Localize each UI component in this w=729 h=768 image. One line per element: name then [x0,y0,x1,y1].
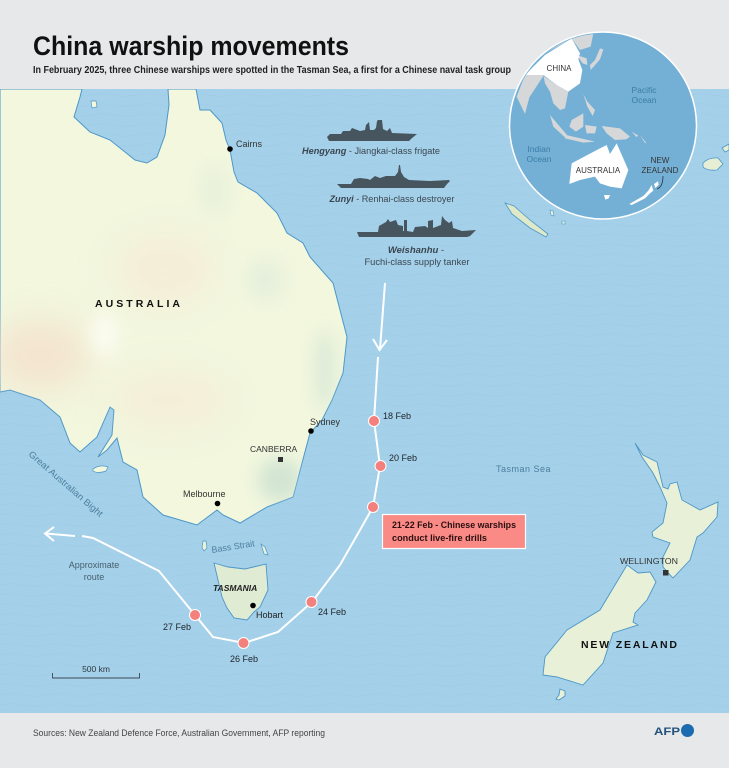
sources: Sources: New Zealand Defence Force, Australian Government, AFP reporting [33,728,325,738]
land: Fiji [703,144,729,170]
callout: conduct live-fire drills [392,533,487,544]
New Zealand [629,181,659,205]
inset label: Indian Ocean: Indian [527,144,551,154]
land: Tasmania [214,563,268,620]
city: Sydney: Sydney [310,417,341,427]
inset leader [657,176,663,189]
city: Wellington: WELLINGTON [620,556,678,566]
date labels: 27 Feb [163,622,191,632]
inset label: Australia: AUSTRALIA [576,166,621,175]
city: Melbourne [183,489,226,506]
inset label: New Zealand: NEW [651,156,669,165]
subtitle: In February 2025, three Chinese warships were spotted in the Tasman Sea, a first for a Chinese naval task group [33,64,511,76]
city: Canberra: CANBERRA [250,444,298,454]
sea label: Tasman Sea: Tasman Sea [496,464,551,474]
route markers [190,416,386,648]
ship: Weishanhu [357,216,476,268]
title: China warship movements [33,31,349,61]
city: Canberra [250,444,298,462]
Australia [569,143,628,188]
city: Sydney [308,417,341,434]
route line [82,357,380,643]
scale bar: 500 km [82,664,110,674]
header background [0,0,729,89]
date labels [163,411,417,664]
city: Melbourne: Melbourne [183,489,226,499]
label: Zunyi - Renhai-class destroyer [329,194,454,205]
land: Kangaroo Island [93,466,108,472]
land: New Caledonia [505,203,548,237]
date labels: 18 Feb [383,411,411,421]
land: New Zealand North Island [635,443,718,578]
label: Hengyang - Jiangkai-class frigate [302,146,440,157]
label: Weishanhu - [388,245,444,256]
label: Fuchi-class supply tanker [364,257,470,268]
route label: route [84,572,104,582]
land: New Zealand South Island [543,565,656,700]
ship: Zunyi [329,165,454,205]
ship: Hengyang [302,120,440,157]
AFP logo [654,724,694,738]
China [525,38,582,92]
callout [382,514,526,548]
arrow: route heading south [373,283,387,350]
callout: 21-22 Feb - Chinese warships [392,520,516,531]
city: Wellington [620,556,678,576]
inset label: Pacific Ocean: Pacific [631,85,657,95]
date labels: 24 Feb [318,607,346,617]
country label: Australia: AUSTRALIA [95,298,180,310]
land: small islands [550,210,565,224]
sea label: Great Australian Bight: Great Australian Bight [27,449,105,519]
land: Bass Strait islands [202,541,268,555]
inset label: Pacific Ocean: Ocean [631,95,657,105]
date labels: 26 Feb [230,654,258,664]
inset label: New Zealand: ZEALAND [642,166,679,175]
region label: Tasmania: TASMANIA [213,583,257,593]
sea label: Bass Strait: Bass Strait [211,538,256,555]
city: Cairns: Cairns [236,139,263,149]
land: Groote Eylandt [91,101,97,108]
route label: Approximate [69,560,119,570]
AFP logo: AFP [654,726,680,738]
city: Hobart [250,603,284,620]
city: Hobart: Hobart [256,610,284,620]
land: Australia [0,89,347,525]
arrow: route heading west [45,527,75,541]
inset globe [510,32,696,219]
inset label: China: CHINA [547,64,572,73]
Tasmania [604,195,610,200]
footer [0,713,729,768]
inset label: Indian Ocean: Ocean [526,154,552,164]
grey Asian land [517,33,647,143]
scale bar [52,664,140,678]
city: Cairns [227,139,263,152]
date labels: 20 Feb [389,453,417,463]
country label: New Zealand: NEW ZEALAND [581,639,677,651]
